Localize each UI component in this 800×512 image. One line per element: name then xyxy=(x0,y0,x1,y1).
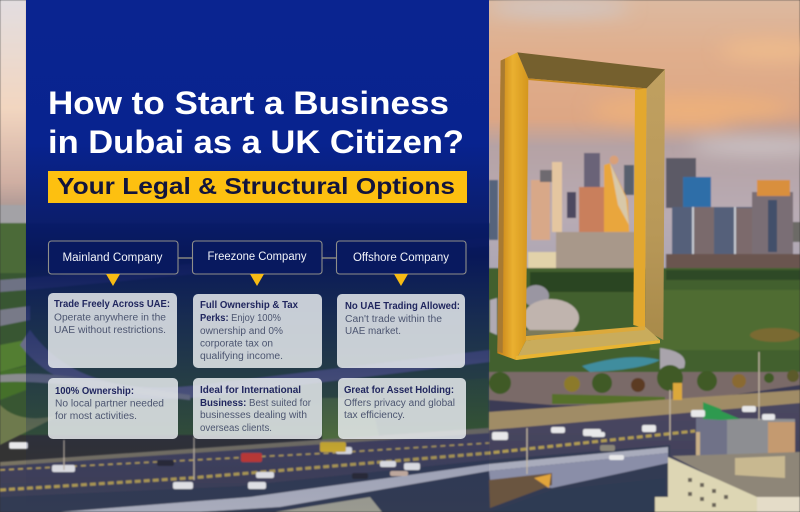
service road xyxy=(489,385,800,414)
main highway xyxy=(0,403,800,512)
park greenery xyxy=(489,268,800,376)
rooftop building with billboard xyxy=(655,418,800,512)
lower dark carriageway xyxy=(0,445,670,512)
subtitle banner xyxy=(48,171,467,203)
plaza pavement xyxy=(489,372,800,412)
card: Ideal for International Business: overseas clients. xyxy=(200,423,272,434)
card: Ideal for International Business: businesses dealing with xyxy=(200,410,307,421)
green road sign xyxy=(703,402,740,420)
column header: Offshore Company: Offshore Company xyxy=(353,252,449,264)
left strip sky xyxy=(0,0,26,215)
title xyxy=(48,85,464,160)
card: Great for Asset Holding: Great for Asset Holding: xyxy=(344,385,454,396)
card: Full Ownership and Tax Perks: Perks: Enjoy 100% xyxy=(200,313,281,324)
overpass top xyxy=(60,447,668,512)
card: Full Ownership and Tax Perks xyxy=(193,294,322,368)
card: No UAE Trading Allowed: Can't trade within the xyxy=(345,314,442,325)
card: Trade Freely Across UAE: Trade Freely Across UAE: xyxy=(54,299,170,310)
card: Ideal for International Business: Business: Best suited for xyxy=(200,398,312,409)
card: 100% Ownership: No local partner needed xyxy=(55,398,164,410)
card: 100% Ownership xyxy=(48,378,178,439)
right pillar gold face xyxy=(633,88,647,328)
card: Trade Freely Across UAE: Operate anywhere in the xyxy=(54,312,166,324)
card: Full Ownership and Tax Perks: Full Ownership & Tax xyxy=(200,300,298,311)
overpass side xyxy=(489,453,668,488)
domes xyxy=(490,285,579,337)
card: Full Ownership and Tax Perks: qualifying income. xyxy=(200,351,283,362)
card: Ideal for International Business xyxy=(193,378,322,439)
card: No UAE Trading Allowed: No UAE Trading Allowed: xyxy=(345,301,460,312)
card: Full Ownership and Tax Perks: corporate tax on xyxy=(200,338,273,350)
title: How to Start a Business xyxy=(48,85,449,121)
card: Trade Freely Across UAE xyxy=(48,293,177,368)
cars xyxy=(9,406,775,489)
card: No UAE Trading Allowed xyxy=(337,294,465,368)
sky xyxy=(0,0,800,270)
card: Ideal for International Business: Ideal for International xyxy=(200,385,301,396)
left pillar xyxy=(497,52,528,360)
title: in Dubai as a UK Citizen? xyxy=(48,124,464,160)
base xyxy=(516,327,660,360)
dashed yellow medians xyxy=(0,443,489,470)
Dubai Frame landmark xyxy=(497,52,665,360)
trees xyxy=(489,365,799,394)
card: Great for Asset Holding: tax efficiency. xyxy=(344,410,405,421)
pool xyxy=(582,357,660,372)
column header: Freezone Company: Freezone Company xyxy=(208,251,307,263)
card: Full Ownership and Tax Perks: ownership and 0% xyxy=(200,326,283,337)
column header: Offshore Company xyxy=(336,241,466,286)
top beam xyxy=(517,52,665,88)
right pillar textured face xyxy=(645,69,665,340)
blue overlay panel xyxy=(26,0,489,512)
card: Great for Asset Holding xyxy=(338,378,466,439)
card: Trade Freely Across UAE: UAE without restrictions. xyxy=(54,325,166,336)
light poles xyxy=(64,352,759,480)
tan verge xyxy=(489,390,800,431)
yellow sign xyxy=(673,383,682,400)
column header: Freezone Company xyxy=(192,241,322,286)
column header: Mainland Company xyxy=(48,241,178,286)
card: 100% Ownership: 100% Ownership: xyxy=(55,386,134,397)
card: 100% Ownership: for most activities. xyxy=(55,411,137,422)
column header: Mainland Company: Mainland Company xyxy=(62,252,163,264)
left green city under panel xyxy=(0,223,489,435)
skyline left of frame and behind it xyxy=(489,153,800,275)
green road strip xyxy=(552,394,665,404)
bridge stub bottom xyxy=(275,497,382,512)
subtitle banner: Your Legal & Structural Options xyxy=(57,173,455,199)
connector lines between headers xyxy=(178,257,336,259)
clouds xyxy=(490,0,800,154)
card: No UAE Trading Allowed: UAE market. xyxy=(345,326,401,337)
card: Great for Asset Holding: Offers privacy and global xyxy=(344,398,455,409)
